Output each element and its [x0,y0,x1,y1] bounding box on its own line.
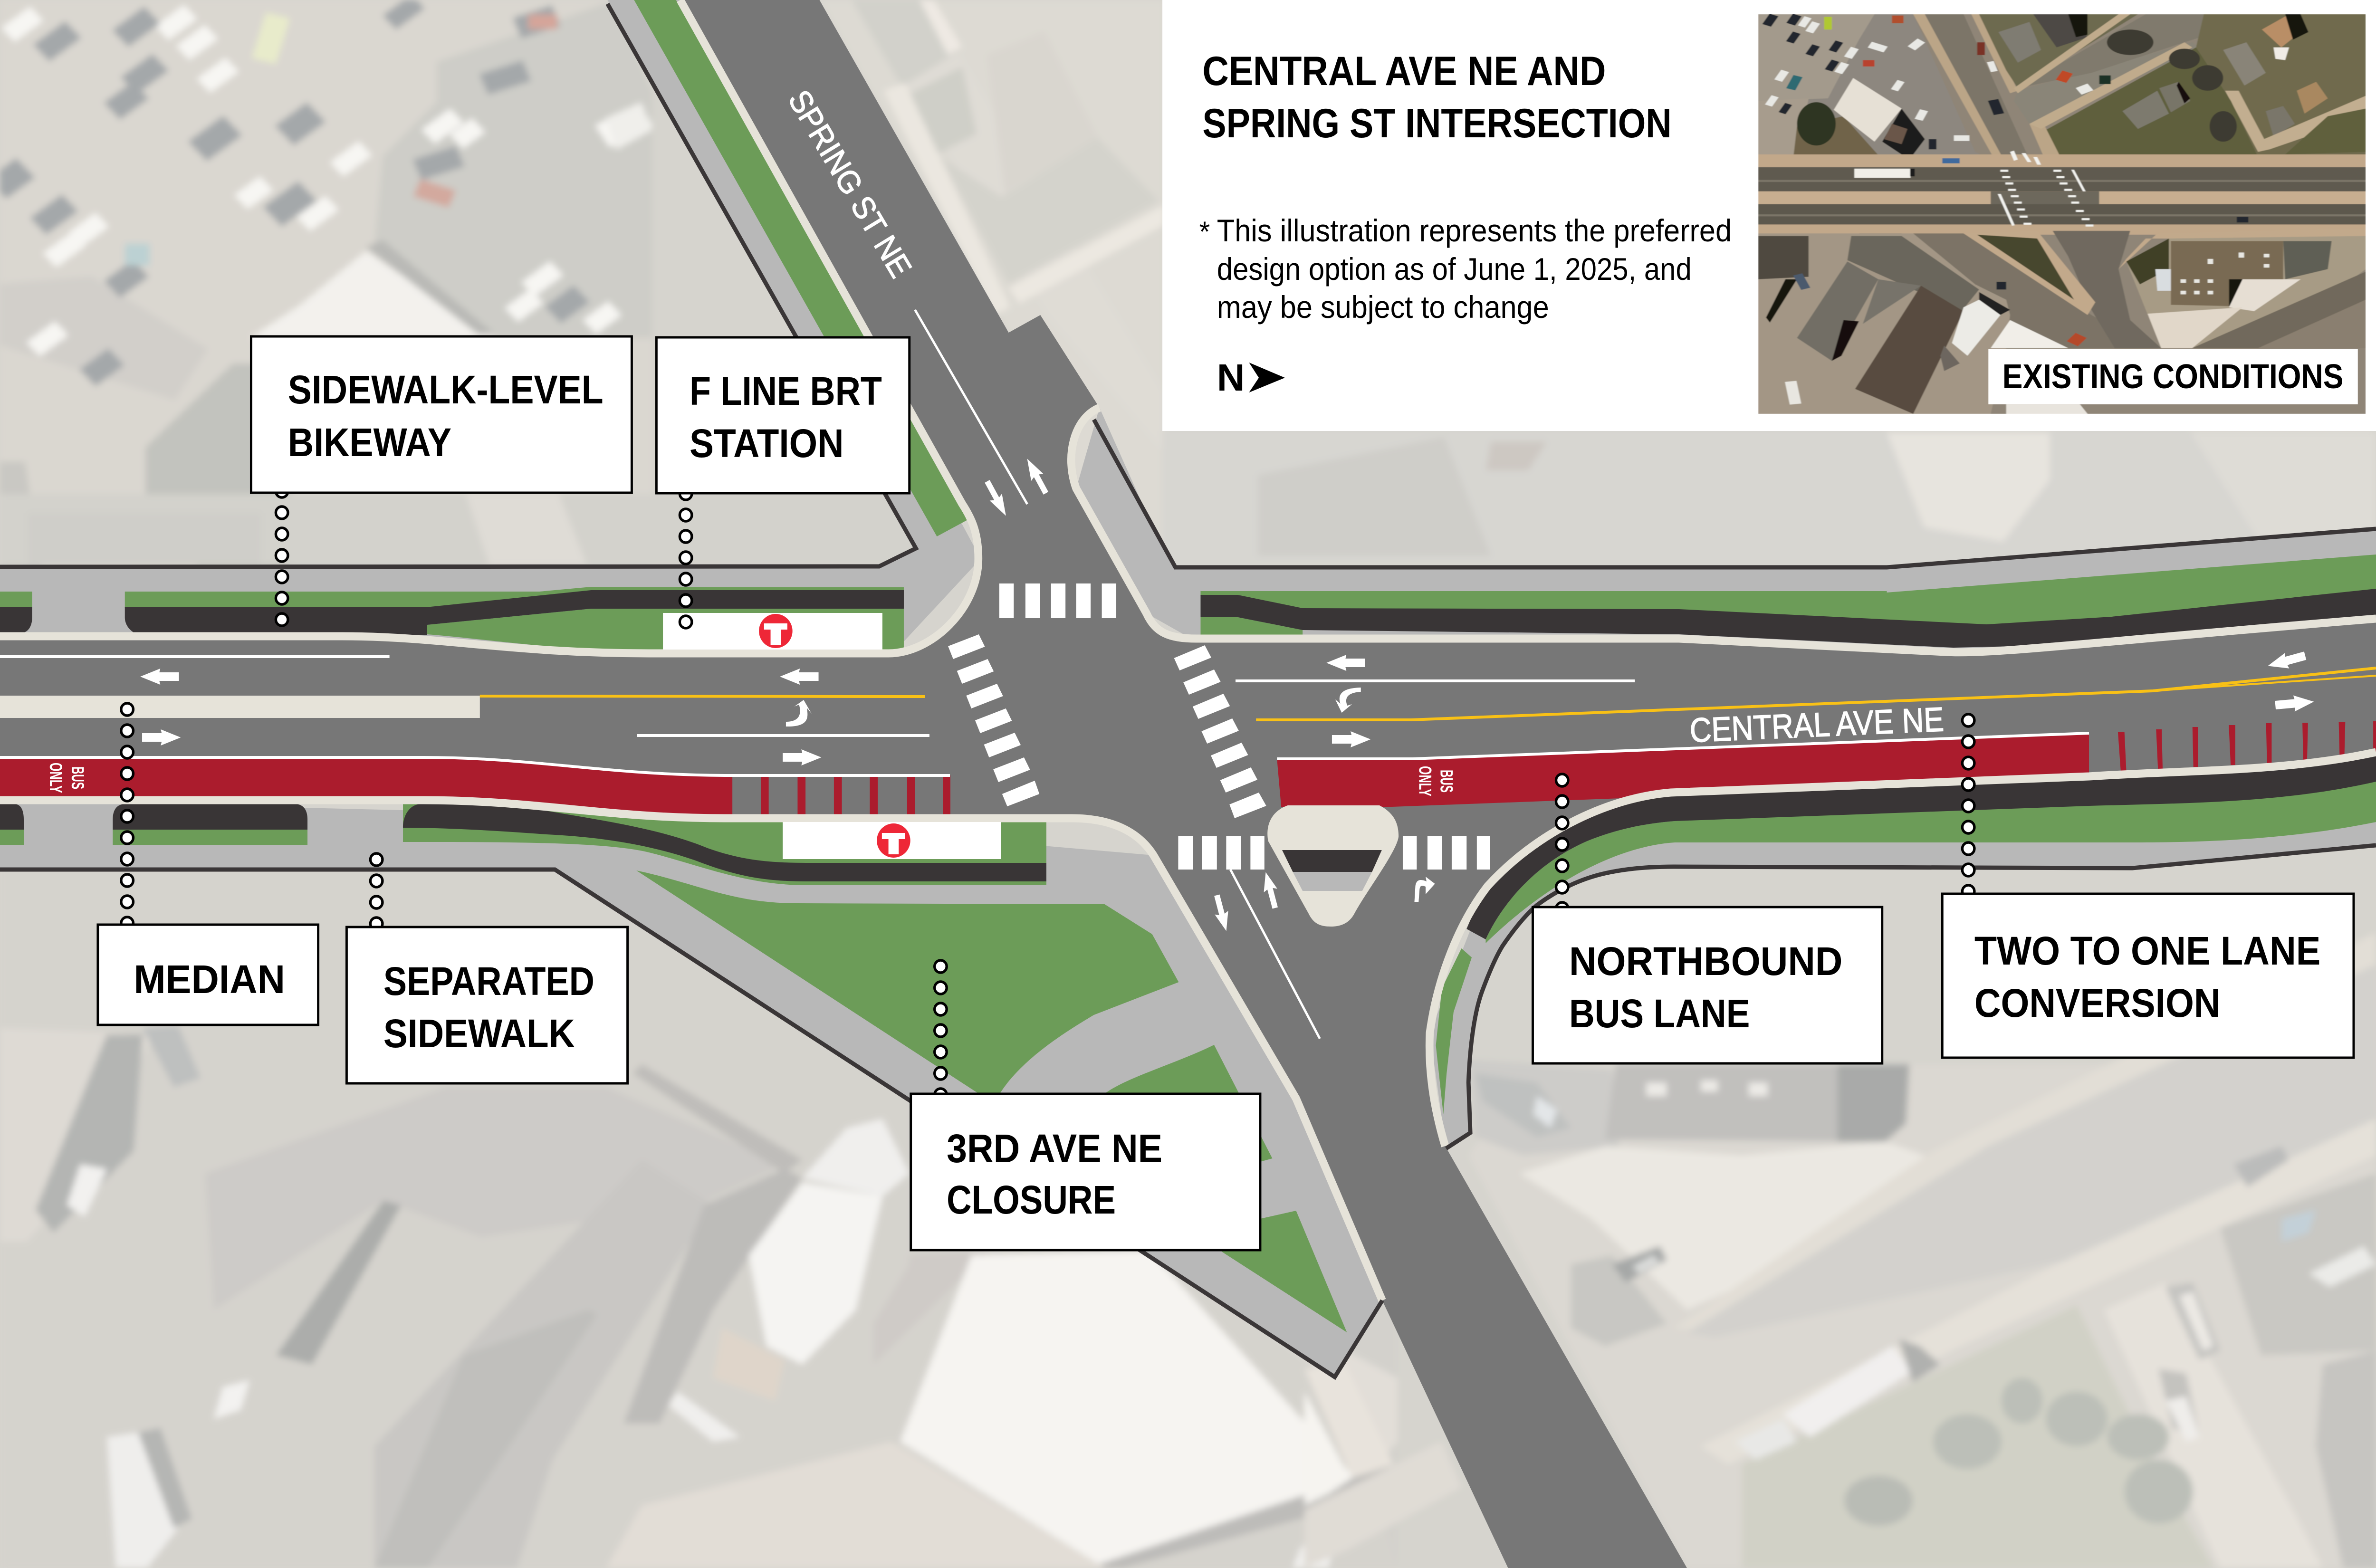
label: sidewalk-level bikeway [251,336,632,493]
label: northbound bus lane: BUS LANE [1569,991,1750,1036]
median [0,696,480,718]
disclaimer note: * [1199,215,1210,248]
F Line station north [663,613,882,650]
north arrow: N [1217,356,1245,399]
label: F Line BRT station [656,337,910,493]
label: two to one lane conversion: TWO TO ONE LANE [1974,928,2320,973]
label: northbound bus lane: NORTHBOUND [1569,939,1842,984]
title: SPRING ST INTERSECTION [1202,101,1672,146]
existing conditions label [1988,349,2358,404]
existing conditions label: EXISTING CONDITIONS [2002,357,2343,396]
callout dots [121,485,1974,1101]
label: median [98,925,318,1025]
bus only marking west [46,763,88,793]
label: 3rd Ave NE closure: CLOSURE [947,1177,1116,1222]
label: sidewalk-level bikeway: SIDEWALK-LEVEL [288,367,604,412]
crosswalks [948,583,1490,870]
street name: Central Ave NE: CENTRAL AVE NE [1689,700,1945,750]
label: two to one lane conversion [1942,894,2354,1058]
north arrow [1217,356,1285,399]
disclaimer note [1199,213,1732,325]
bus only marking west: BUS [68,766,88,789]
panel: existing conditions and title background [1162,0,2376,431]
disclaimer note: may be subject to change [1217,289,1549,325]
bus only marking west: ONLY [46,763,66,793]
label: median: MEDIAN [134,957,285,1002]
label: northbound bus lane [1533,907,1882,1063]
bus only marking east: BUS [1437,770,1456,793]
sidewalk-level bikeway [0,589,2376,939]
traffic island [1267,805,1399,927]
label: two to one lane conversion: CONVERSION [1974,981,2221,1025]
lane lines [0,310,2089,1039]
bus only marking east [1415,766,1456,796]
existing conditions aerial photo [1758,14,2366,414]
bus lanes [0,721,2376,818]
label: F Line BRT station: F LINE BRT [690,369,882,413]
label: 3rd Ave NE closure [911,1094,1260,1250]
label: separated sidewalk: SIDEWALK [383,1011,575,1056]
F Line station south [783,822,1001,859]
label: 3rd Ave NE closure: 3RD AVE NE [947,1126,1162,1171]
disclaimer note: design option as of June 1, 2025, and [1217,251,1692,287]
yellow centre lines [480,668,2376,720]
label: sidewalk-level bikeway: BIKEWAY [288,420,451,465]
label: F Line BRT station: STATION [690,421,843,466]
title [1202,48,1672,146]
disclaimer note: This illustration represents the preferred [1217,213,1732,248]
title: CENTRAL AVE NE AND [1202,48,1606,94]
label: separated sidewalk: SEPARATED [383,959,594,1004]
label: separated sidewalk [346,927,628,1083]
street name: Spring St NE: SPRING ST NE [781,84,918,284]
lane arrows [140,455,2315,933]
bus only marking east: ONLY [1415,766,1435,796]
